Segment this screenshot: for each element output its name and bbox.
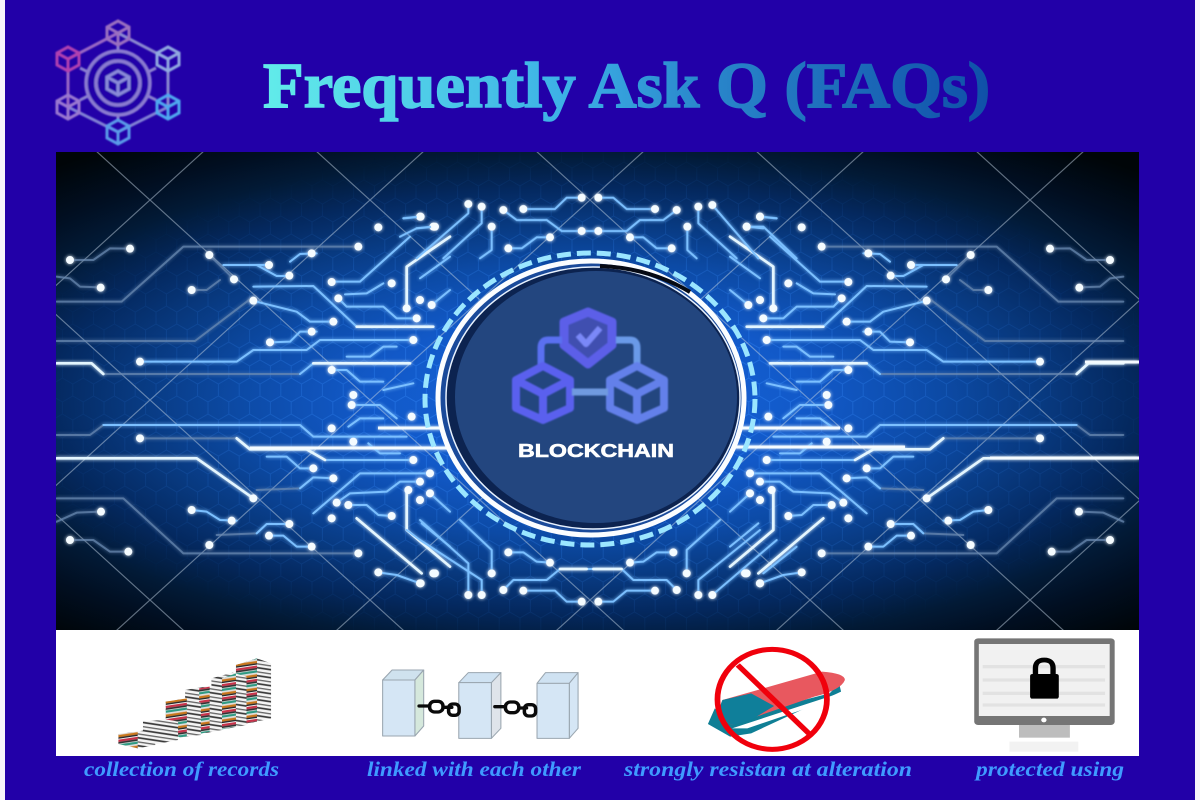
ring black arc (600, 266, 690, 292)
panel: white icon strip (56, 630, 1139, 756)
caption: strongly resistan at alteration: strongly resistan at alteration (623, 757, 912, 781)
icon: monitor with padlock (974, 638, 1115, 752)
white ring (438, 261, 744, 535)
caption: linked with each other: linked with each other (367, 757, 582, 781)
chain links (419, 701, 536, 716)
caption: collection of records: collection of records (84, 757, 279, 781)
center disc (455, 271, 737, 523)
icon: staircase of book stacks (118, 658, 271, 748)
icon: crossed-out eraser (708, 649, 845, 749)
thin inner ring (446, 267, 740, 529)
icon: blockchain network hexagon logo (57, 21, 179, 144)
caption: protected using: protected using (974, 757, 1124, 781)
side bright bars (250, 362, 1139, 458)
right edge strip (1195, 0, 1200, 800)
icon: shield and linked cubes (516, 312, 664, 420)
block three (537, 673, 578, 738)
block two (459, 673, 501, 738)
panel: blockchain circuit hero image (56, 152, 1139, 630)
padlock (1030, 660, 1059, 699)
block one (383, 670, 424, 736)
dashed outer ring (425, 253, 755, 545)
icon: chained blocks (383, 670, 578, 738)
title: Frequently Ask Q (FAQs) (263, 50, 990, 122)
circuit traces (57, 198, 1139, 602)
left edge strip (0, 0, 5, 800)
center label: BLOCKCHAIN (518, 441, 674, 461)
